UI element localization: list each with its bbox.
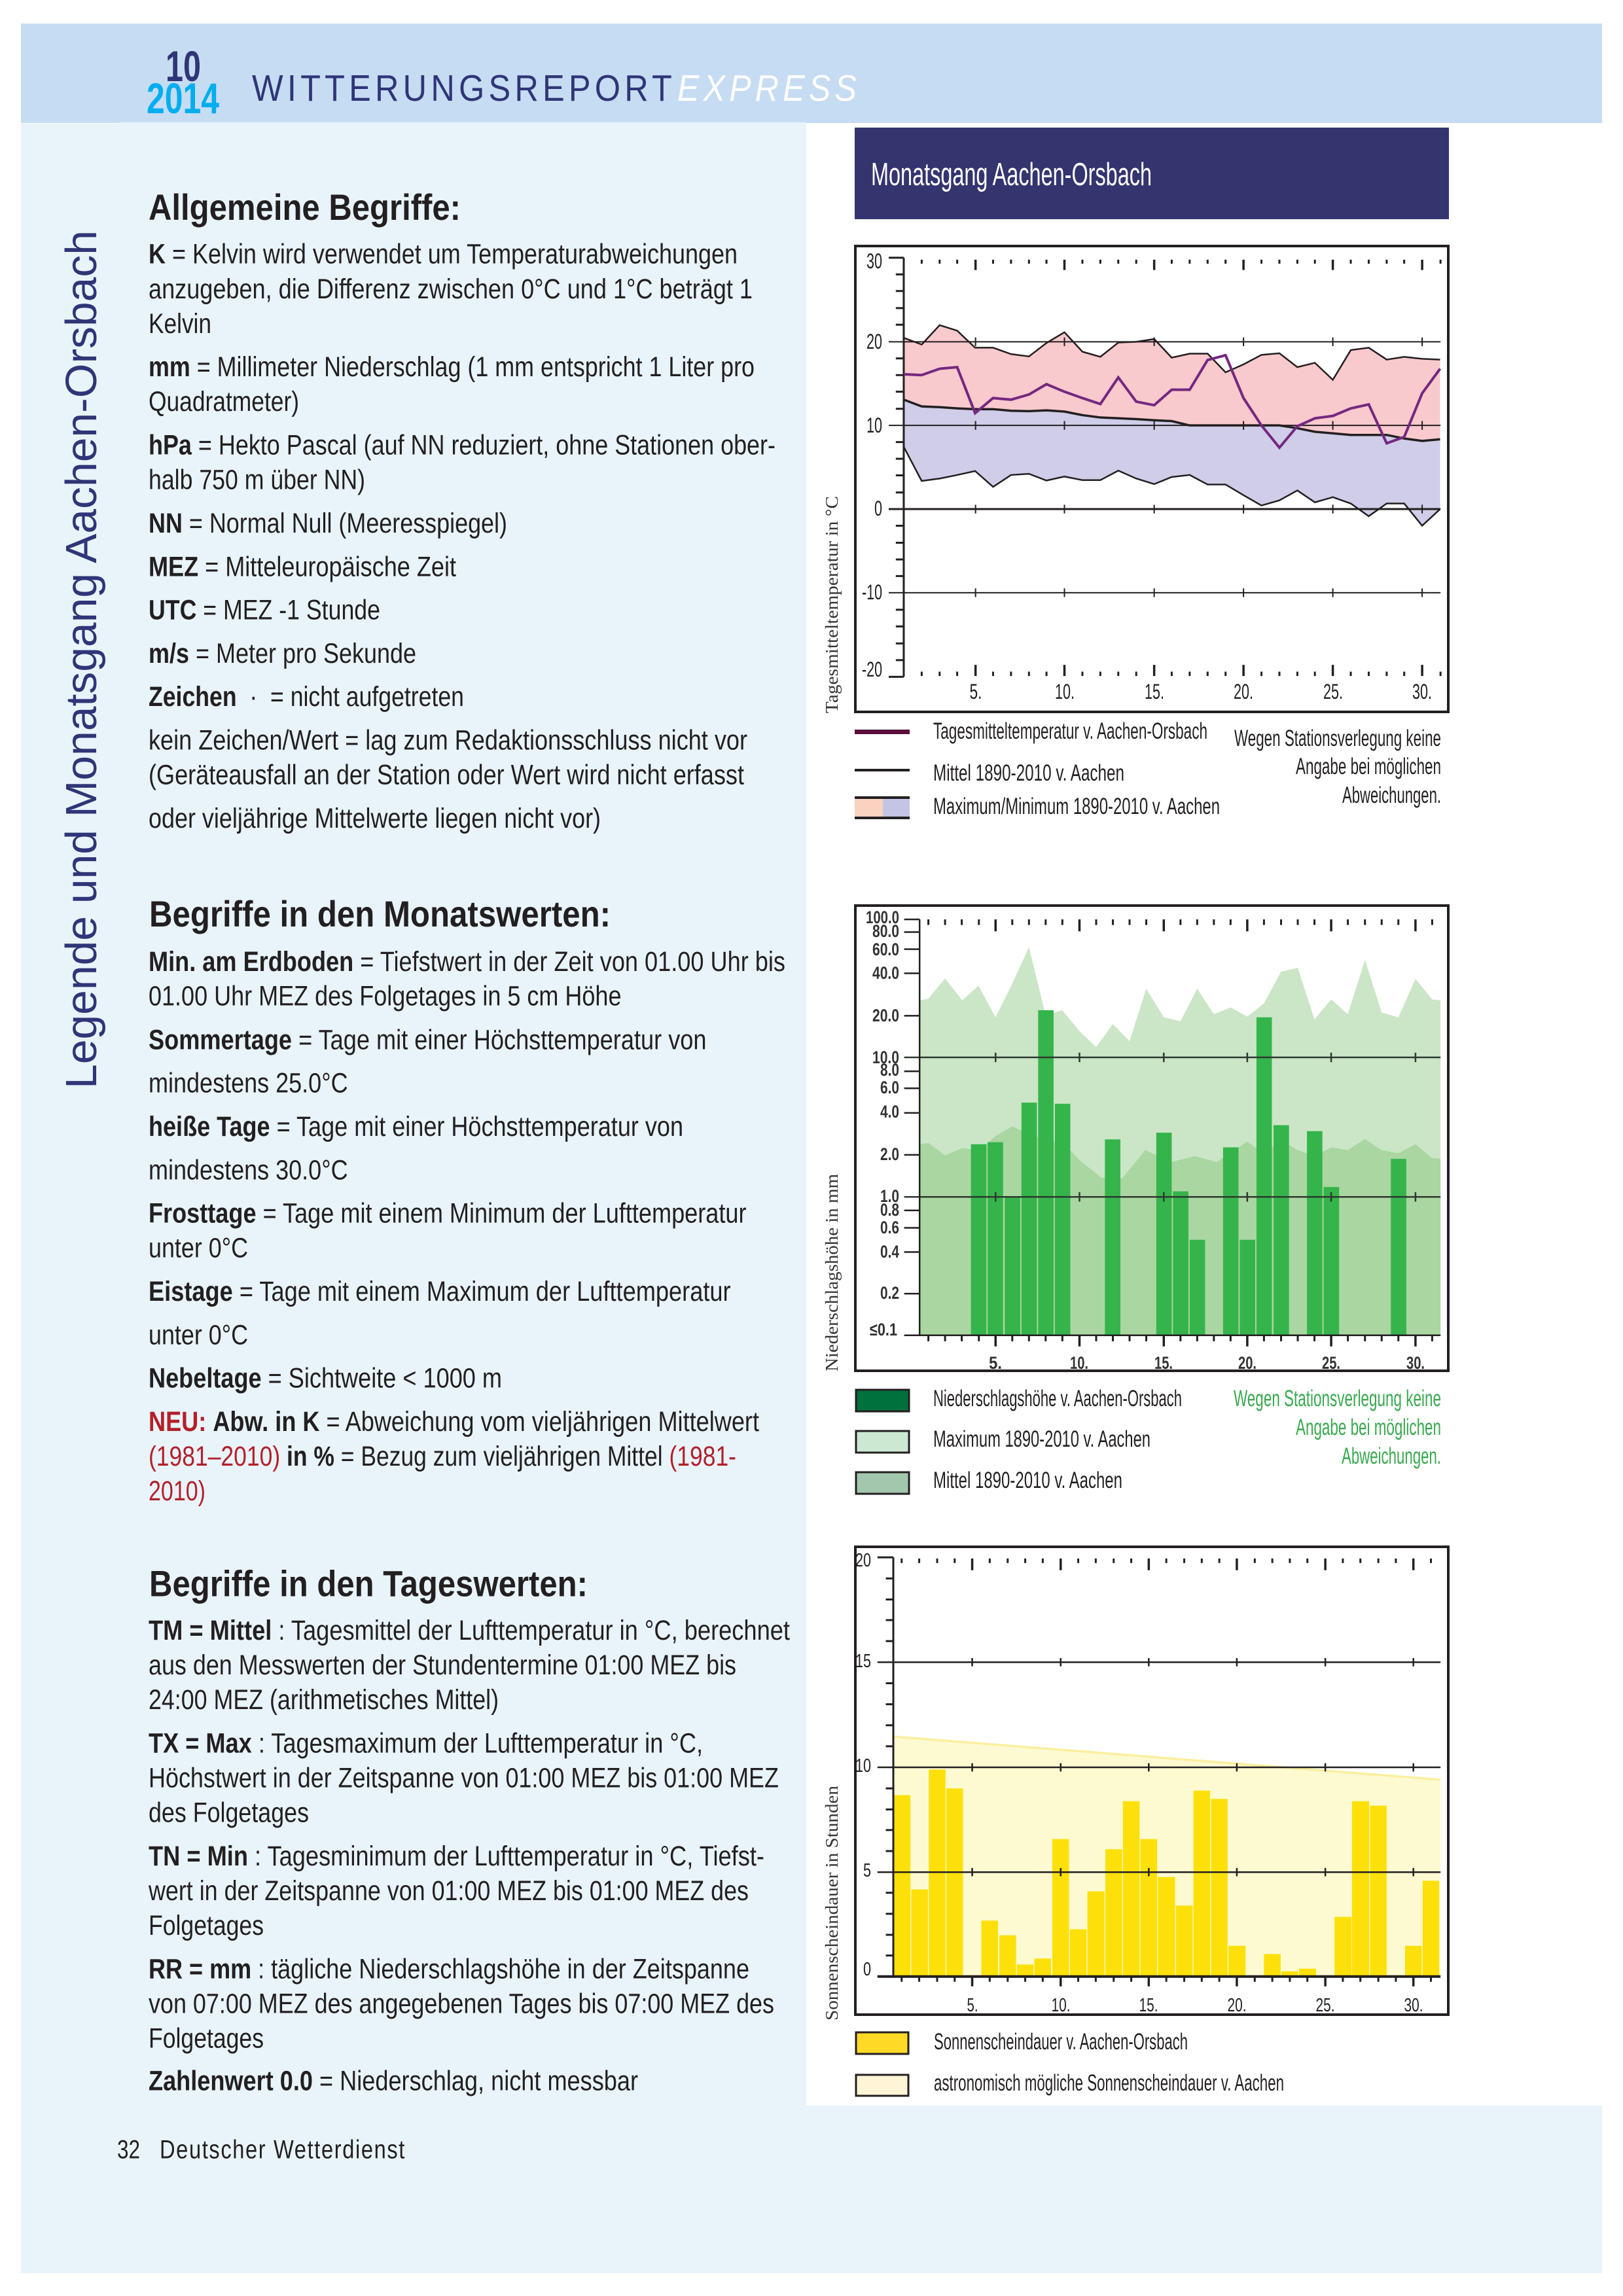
chart: Sonnenscheindauer: 5. bbox=[967, 1995, 978, 2016]
text block: Begriffe in den Tageswerten: von 07:00 MEZ des angegebenen Tages bis 07:00 MEZ des bbox=[149, 1988, 774, 2019]
legend: sunshine chart: Sonnenscheindauer v. Aachen-Orsbach bbox=[934, 2029, 1188, 2055]
text block: Begriffe in den Monatswerten: unter 0°C bbox=[149, 1319, 248, 1351]
legend: precipitation chart bbox=[856, 1386, 1182, 1494]
chart: Niederschlagshöhe: 40.0 bbox=[872, 963, 899, 983]
chart: Niederschlagshöhe: 0.6 bbox=[880, 1218, 899, 1237]
note: Stationsverlegung (temperature): Abweichungen. bbox=[1342, 783, 1441, 808]
text block: Begriffe in den Tageswerten: TM = Mittel : Tagesmittel der Lufttemperatur in °C, berechnet bbox=[149, 1615, 790, 1646]
chart: Sonnenscheindauer: 20 bbox=[855, 1550, 871, 1571]
chart: Tagesmitteltemperatur: 5. bbox=[970, 680, 982, 703]
text block: Allgemeine Begriffe: (Geräteausfall an der Station oder Wert wird nicht erfasst bbox=[149, 760, 744, 791]
chart: Tagesmitteltemperatur: 20. bbox=[1234, 680, 1253, 703]
chart: Niederschlagshöhe: 5. bbox=[989, 1353, 1002, 1373]
text block: Begriffe in den Monatswerten: heiße Tage = Tage mit einer Höchsttemperatur von bbox=[149, 1111, 683, 1142]
chart: Tagesmitteltemperatur: 20 bbox=[866, 330, 882, 353]
text block: Allgemeine Begriffe: MEZ = Mitteleuropäische Zeit bbox=[149, 551, 456, 582]
note: Stationsverlegung (temperature): Wegen Stationsverlegung keine bbox=[1234, 726, 1441, 751]
text block: Begriffe in den Tageswerten: Zahlenwert 0.0 = Niederschlag, nicht messbar bbox=[149, 2065, 638, 2096]
legend: sunshine chart bbox=[856, 2029, 1284, 2096]
header band bbox=[21, 24, 1602, 124]
text block: Allgemeine Begriffe: Zeichen · = nicht aufgetreten bbox=[149, 681, 464, 713]
chart: Tagesmitteltemperatur: 25. bbox=[1323, 680, 1343, 703]
chart: Sonnenscheindauer: 20. bbox=[1228, 1995, 1246, 2016]
text block: Begriffe in den Monatswerten bbox=[149, 893, 785, 1507]
text block: Begriffe in den Monatswerten: mindestens 30.0°C bbox=[149, 1154, 348, 1186]
note: Stationsverlegung (precipitation): Wegen Stationsverlegung keine bbox=[1234, 1386, 1441, 1411]
text block: Begriffe in den Monatswerten: 01.00 Uhr MEZ des Folgetages in 5 cm Höhe bbox=[149, 980, 622, 1012]
note: Stationsverlegung (temperature): Angabe bei möglichen bbox=[1296, 754, 1441, 779]
chart: Niederschlagshöhe: Niederschlagshöhe in mm bbox=[822, 1174, 842, 1371]
chart: Niederschlagshöhe: 100.0 bbox=[866, 908, 899, 927]
legend: precipitation chart: Maximum 1890-2010 v. Aachen bbox=[933, 1426, 1150, 1452]
title bar: Monatsgang Aachen-Orsbach: Monatsgang Aachen-Orsbach bbox=[871, 157, 1152, 192]
chart: Niederschlagshöhe: 0.2 bbox=[880, 1283, 899, 1303]
text block: Begriffe in den Tageswerten: TX = Max : Tagesmaximum der Lufttemperatur in °C, bbox=[149, 1727, 703, 1759]
text block: Allgemeine Begriffe: mm = Millimeter Niederschlag (1 mm entspricht 1 Liter pro bbox=[149, 351, 755, 383]
note: Stationsverlegung (precipitation) bbox=[1234, 1386, 1441, 1469]
text block: Begriffe in den Monatswerten: 2010) bbox=[149, 1475, 205, 1507]
text block: Allgemeine Begriffe: oder vieljährige Mittelwerte liegen nicht vor) bbox=[149, 803, 601, 834]
chart: Niederschlagshöhe: 25. bbox=[1322, 1353, 1340, 1373]
text block: Allgemeine Begriffe: m/s = Meter pro Sekunde bbox=[149, 638, 416, 669]
chart: Tagesmitteltemperatur: 30 bbox=[866, 249, 882, 273]
text block: Allgemeine Begriffe: anzugeben, die Differenz zwischen 0°C und 1°C beträgt 1 bbox=[149, 274, 753, 305]
chart: Niederschlagshöhe: 30. bbox=[1406, 1353, 1425, 1373]
chart: Niederschlagshöhe: 60.0 bbox=[872, 940, 899, 959]
chart: Tagesmitteltemperatur: 10 bbox=[866, 414, 882, 437]
text block: Begriffe in den Tageswerten: aus den Messwerten der Stundentermine 01:00 MEZ bis bbox=[149, 1650, 736, 1681]
text block: Allgemeine Begriffe: hPa = Hekto Pascal (auf NN reduziert, ohne Stationen ober- bbox=[149, 429, 776, 461]
chart: Niederschlagshöhe: ≤0.1 bbox=[870, 1320, 897, 1339]
legend: temperature chart bbox=[855, 718, 1220, 819]
text block: Begriffe in den Monatswerten: Eistage = Tage mit einem Maximum der Lufttemperatur bbox=[149, 1276, 731, 1307]
text block: Begriffe in den Monatswerten: Min. am Erdboden = Tiefstwert in der Zeit von 01.00 Uhr bis bbox=[149, 946, 785, 978]
text block: Allgemeine Begriffe: kein Zeichen/Wert = lag zum Redaktionsschluss nicht vor bbox=[149, 725, 747, 756]
legend: temperature chart: Tagesmitteltemperatur v. Aachen-Orsbach bbox=[933, 718, 1207, 744]
chart: Niederschlagshöhe: 20.0 bbox=[872, 1006, 899, 1025]
chart: Sonnenscheindauer: 25. bbox=[1315, 1995, 1335, 2016]
chart: Niederschlagshöhe: 20. bbox=[1238, 1353, 1257, 1373]
title bar: Monatsgang Aachen-Orsbach bbox=[855, 128, 1449, 219]
header band: EXPRESS bbox=[677, 67, 861, 109]
text block: Begriffe in den Monatswerten: Begriffe in den Monatswerten: bbox=[149, 893, 611, 934]
chart: Niederschlagshöhe: 0.8 bbox=[880, 1200, 899, 1220]
text block: Begriffe in den Monatswerten: (1981–2010) in % = Bezug zum vieljährigen Mittel (1981- bbox=[149, 1441, 736, 1472]
chart: Niederschlagshöhe: 1.0 bbox=[880, 1186, 899, 1206]
text block: Allgemeine Begriffe: Kelvin bbox=[149, 308, 211, 340]
note: Stationsverlegung (precipitation): Abweichungen. bbox=[1342, 1443, 1441, 1469]
text block: Begriffe in den Monatswerten: unter 0°C bbox=[149, 1233, 248, 1264]
chart: Sonnenscheindauer: Sonnenscheindauer in Stunden bbox=[822, 1785, 842, 2021]
text block: Begriffe in den Monatswerten: Sommertage = Tage mit einer Höchsttemperatur von bbox=[149, 1024, 707, 1055]
text block: Begriffe in den Tageswerten: des Folgetages bbox=[149, 1797, 309, 1828]
text block: Begriffe in den Monatswerten: Nebeltage = Sichtweite < 1000 m bbox=[149, 1363, 502, 1394]
chart: Tagesmitteltemperatur: 0 bbox=[874, 497, 882, 520]
text block: Begriffe in den Monatswerten: mindestens 25.0°C bbox=[149, 1068, 348, 1099]
header band: 10 bbox=[166, 42, 201, 90]
footer: page number and publisher: Deutscher Wetterdienst bbox=[160, 2136, 406, 2164]
chart: Niederschlagshöhe: 8.0 bbox=[880, 1060, 899, 1080]
chart: Sonnenscheindauer bbox=[822, 1547, 1448, 2021]
footer: page number and publisher: 32 bbox=[117, 2136, 140, 2164]
text block: Allgemeine Begriffe: Allgemeine Begriffe: bbox=[149, 186, 461, 228]
text block: Begriffe in den Tageswerten: Höchstwert in der Zeitspanne von 01:00 MEZ bis 01:00 MEZ bbox=[149, 1762, 779, 1793]
header band: WITTERUNGSREPORT bbox=[252, 67, 676, 109]
text block: Begriffe in den Tageswerten: Folgetages bbox=[149, 2022, 264, 2054]
text block: Allgemeine Begriffe: NN = Normal Null (Meeresspiegel) bbox=[149, 508, 507, 539]
chart: Niederschlagshöhe: 10. bbox=[1070, 1353, 1088, 1373]
chart: Tagesmitteltemperatur: 10. bbox=[1055, 680, 1075, 703]
header band: 2014 bbox=[147, 74, 219, 122]
legend: sunshine chart: astronomisch mögliche Sonnenscheindauer v. Aachen bbox=[934, 2070, 1284, 2096]
note: Stationsverlegung (precipitation): Angabe bei möglichen bbox=[1296, 1415, 1441, 1440]
chart: Tagesmitteltemperatur: Tagesmitteltemperatur in °C bbox=[822, 496, 842, 713]
chart: Niederschlagshöhe: 15. bbox=[1154, 1353, 1173, 1373]
chart: Sonnenscheindauer: 30. bbox=[1404, 1995, 1423, 2016]
text block: Allgemeine Begriffe bbox=[149, 186, 776, 834]
sidebar vertical title: Legende und Monatsgang Aachen-Orsbach bbox=[57, 230, 106, 1089]
chart: Niederschlagshöhe: 6.0 bbox=[880, 1078, 899, 1097]
chart: Sonnenscheindauer: 10. bbox=[1051, 1995, 1071, 2016]
text block: Allgemeine Begriffe: halb 750 m über NN) bbox=[149, 465, 365, 496]
chart: Sonnenscheindauer: 15 bbox=[855, 1651, 871, 1672]
text block: Begriffe in den Tageswerten: 24:00 MEZ (arithmetisches Mittel) bbox=[149, 1684, 499, 1716]
legend: precipitation chart: Mittel 1890-2010 v. Aachen bbox=[933, 1468, 1122, 1493]
text block: Begriffe in den Tageswerten: Begriffe in den Tageswerten: bbox=[149, 1563, 588, 1604]
note: Stationsverlegung (temperature) bbox=[1234, 726, 1441, 808]
chart: Sonnenscheindauer: 15. bbox=[1139, 1995, 1158, 2016]
chart: Sonnenscheindauer: 10 bbox=[855, 1756, 871, 1776]
chart: Tagesmitteltemperatur: 30. bbox=[1412, 680, 1432, 703]
text block: Begriffe in den Monatswerten: NEU: Abw. in K = Abweichung vom vieljährigen Mittelwert bbox=[149, 1406, 759, 1438]
chart: Sonnenscheindauer: 5 bbox=[863, 1860, 871, 1881]
text block: Begriffe in den Tageswerten: TN = Min : Tagesminimum der Lufttemperatur in °C, Tiefst- bbox=[149, 1841, 764, 1872]
text block: Allgemeine Begriffe: Quadratmeter) bbox=[149, 386, 299, 417]
chart: Niederschlagshöhe: 10.0 bbox=[872, 1048, 899, 1067]
text block: Begriffe in den Monatswerten: Frosttage = Tage mit einem Minimum der Lufttemperatur bbox=[149, 1198, 746, 1229]
chart: Niederschlagshöhe bbox=[822, 906, 1448, 1373]
legend: temperature chart: Mittel 1890-2010 v. Aachen bbox=[933, 760, 1124, 786]
chart: Tagesmitteltemperatur: -20 bbox=[862, 658, 882, 681]
chart: Niederschlagshöhe: 4.0 bbox=[880, 1102, 899, 1122]
chart: Tagesmitteltemperatur: 15. bbox=[1145, 680, 1164, 703]
chart: Sonnenscheindauer: 0 bbox=[863, 1959, 871, 1980]
text block: Allgemeine Begriffe: UTC = MEZ -1 Stunde bbox=[149, 595, 380, 626]
chart: Niederschlagshöhe: 0.4 bbox=[880, 1242, 899, 1262]
text block: Begriffe in den Tageswerten: Folgetages bbox=[149, 1910, 264, 1941]
legend: precipitation chart: Niederschlagshöhe v. Aachen-Orsbach bbox=[933, 1386, 1182, 1411]
text block: Begriffe in den Tageswerten bbox=[148, 1563, 790, 2096]
legend: temperature chart: Maximum/Minimum 1890-2010 v. Aachen bbox=[933, 794, 1220, 819]
text block: Begriffe in den Tageswerten: wert in der Zeitspanne von 01:00 MEZ bis 01:00 MEZ des bbox=[148, 1875, 749, 1907]
chart: Tagesmitteltemperatur: -10 bbox=[862, 580, 882, 604]
text block: Allgemeine Begriffe: K = Kelvin wird verwendet um Temperaturabweichungen bbox=[149, 239, 738, 270]
chart: Niederschlagshöhe: 80.0 bbox=[872, 921, 899, 941]
chart: Tagesmitteltemperatur bbox=[822, 246, 1448, 713]
chart: Niederschlagshöhe: 2.0 bbox=[880, 1144, 899, 1164]
text block: Begriffe in den Tageswerten: RR = mm : tägliche Niederschlagshöhe in der Zeitspanne bbox=[149, 1953, 749, 1985]
